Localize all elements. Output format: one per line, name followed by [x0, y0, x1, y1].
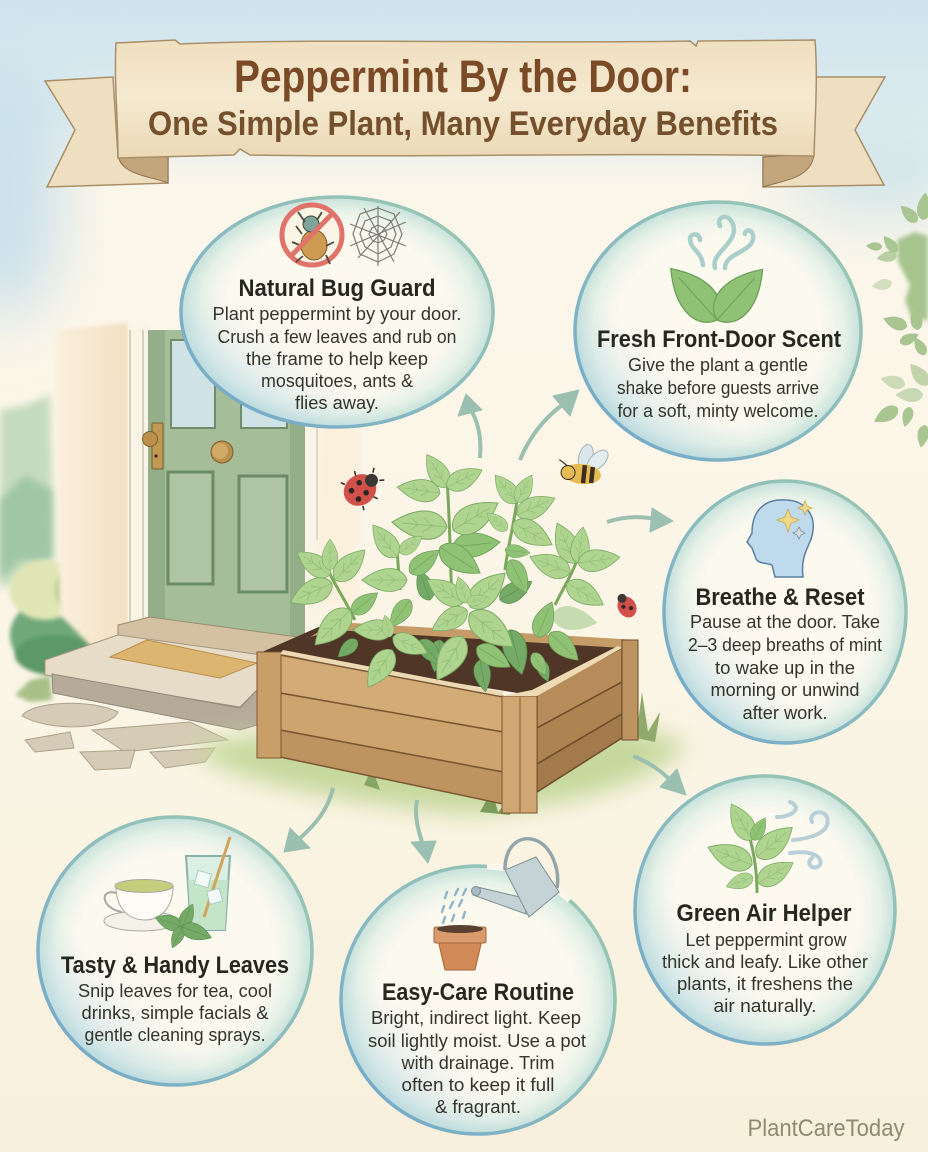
door handle and knob	[142, 423, 233, 469]
icon: tea cup	[104, 880, 178, 931]
left fold	[118, 156, 168, 183]
upper sprig leaves	[285, 449, 621, 654]
foliage: left background shrubs	[0, 395, 120, 702]
lower step top	[45, 635, 262, 707]
icon: head with sparkles	[747, 500, 813, 577]
body text	[688, 612, 882, 723]
front cluster leaves	[353, 564, 585, 693]
icon: no bugs sign	[282, 205, 342, 265]
front planks	[280, 655, 503, 804]
heading: Tasty & Handy Leaves	[61, 952, 289, 979]
body text: Let peppermint grow	[686, 930, 847, 950]
body text: Snip leaves for tea, cool	[78, 981, 272, 1001]
body text: plants, it freshens the	[677, 974, 853, 994]
heading: Breathe & Reset	[696, 584, 865, 611]
ladybug: left	[335, 460, 391, 515]
body text: for a soft, minty welcome.	[618, 401, 818, 421]
doormat	[110, 640, 257, 678]
door	[142, 330, 305, 638]
house wall	[55, 323, 357, 655]
stone steps and doormat	[22, 617, 305, 770]
left post	[257, 652, 281, 758]
watermark: PlantCareToday	[748, 1115, 904, 1142]
icon: mint sprig	[153, 901, 214, 950]
body text: air naturally.	[714, 996, 816, 1016]
stems	[328, 480, 577, 620]
panel: breathe and reset	[664, 481, 906, 743]
door windows	[171, 340, 287, 428]
body text	[78, 981, 272, 1045]
body text: Give the plant a gentle	[628, 355, 808, 375]
arrow to bug guard	[458, 394, 482, 458]
body text: drinks, simple facials &	[82, 1003, 268, 1023]
body text: flies away.	[295, 393, 379, 413]
arrow to tasty leaves	[284, 788, 333, 852]
right post	[622, 640, 638, 740]
bee	[557, 441, 613, 487]
title line 1: Peppermint By the Door:	[234, 51, 692, 102]
body text: morning or unwind	[710, 680, 860, 700]
panel: green air helper	[635, 776, 895, 1044]
foliage: top right background leaves	[866, 192, 928, 449]
body text: after work.	[742, 703, 828, 723]
upper threshold	[118, 617, 305, 655]
icon: iced drink glass	[186, 837, 230, 930]
heading: Green Air Helper	[676, 900, 852, 927]
right ribbon tail	[763, 77, 885, 187]
left ribbon tail	[45, 77, 168, 187]
corner post	[502, 646, 622, 813]
right side planks	[537, 648, 622, 792]
body text: Pause at the door. Take	[690, 612, 880, 632]
banner body	[115, 40, 816, 158]
heading: Easy-Care Routine	[382, 979, 574, 1006]
body text: often to keep it full	[402, 1075, 554, 1095]
icon: spider web	[350, 206, 406, 266]
body text: shake before guests arrive	[617, 378, 819, 398]
door panels	[168, 472, 287, 592]
grass patch under the planter	[190, 692, 690, 815]
icon: sprig with air swirls	[704, 799, 828, 894]
body text	[662, 930, 868, 1016]
body text: 2–3 deep breaths of mint	[688, 635, 882, 655]
body text	[617, 355, 819, 421]
arrow to easy care	[411, 800, 436, 863]
body text: Crush a few leaves and rub on	[218, 327, 456, 347]
right fold	[763, 154, 814, 187]
heading: Natural Bug Guard	[238, 275, 436, 302]
body text: gentle cleaning sprays.	[84, 1025, 266, 1045]
soil and back rim	[262, 622, 636, 695]
arrows from plant to benefit bubbles	[284, 390, 686, 863]
icon: watering can	[442, 839, 559, 923]
panel: easy-care routine	[341, 839, 615, 1134]
arrow to breathe	[607, 508, 673, 532]
panel: fresh front-door scent	[575, 202, 861, 460]
body text: with drainage. Trim	[400, 1053, 554, 1073]
arrow to green air	[633, 756, 686, 795]
icon: mint leaves with scent swirls	[658, 217, 775, 332]
body text: to wake up in the	[715, 658, 855, 678]
body text: thick and leafy. Like other	[662, 952, 868, 972]
body text: Bright, indirect light. Keep	[371, 1008, 581, 1028]
path stones	[22, 703, 228, 770]
raised wooden planter	[257, 622, 638, 813]
panel: natural bug guard	[181, 197, 493, 427]
body text: soil lightly moist. Use a pot	[368, 1031, 586, 1051]
body text	[212, 304, 462, 413]
icon: terracotta pot	[434, 925, 486, 970]
title banner	[45, 40, 885, 187]
back leaves	[334, 530, 599, 693]
body text	[368, 1008, 586, 1117]
title line 2: One Simple Plant, Many Everyday Benefits	[148, 105, 778, 143]
ladybug: right	[612, 590, 640, 621]
body text: & fragrant.	[435, 1097, 521, 1117]
stone face	[52, 674, 257, 730]
body text: the frame to help keep	[246, 349, 428, 369]
panel: tasty and handy leaves	[38, 817, 312, 1085]
front rim	[280, 650, 503, 696]
arrow to fresh scent	[520, 390, 579, 460]
body text: mosquitoes, ants &	[261, 371, 413, 391]
peppermint plant	[285, 449, 621, 693]
heading: Fresh Front-Door Scent	[597, 326, 841, 353]
body text: Plant peppermint by your door.	[212, 304, 462, 324]
